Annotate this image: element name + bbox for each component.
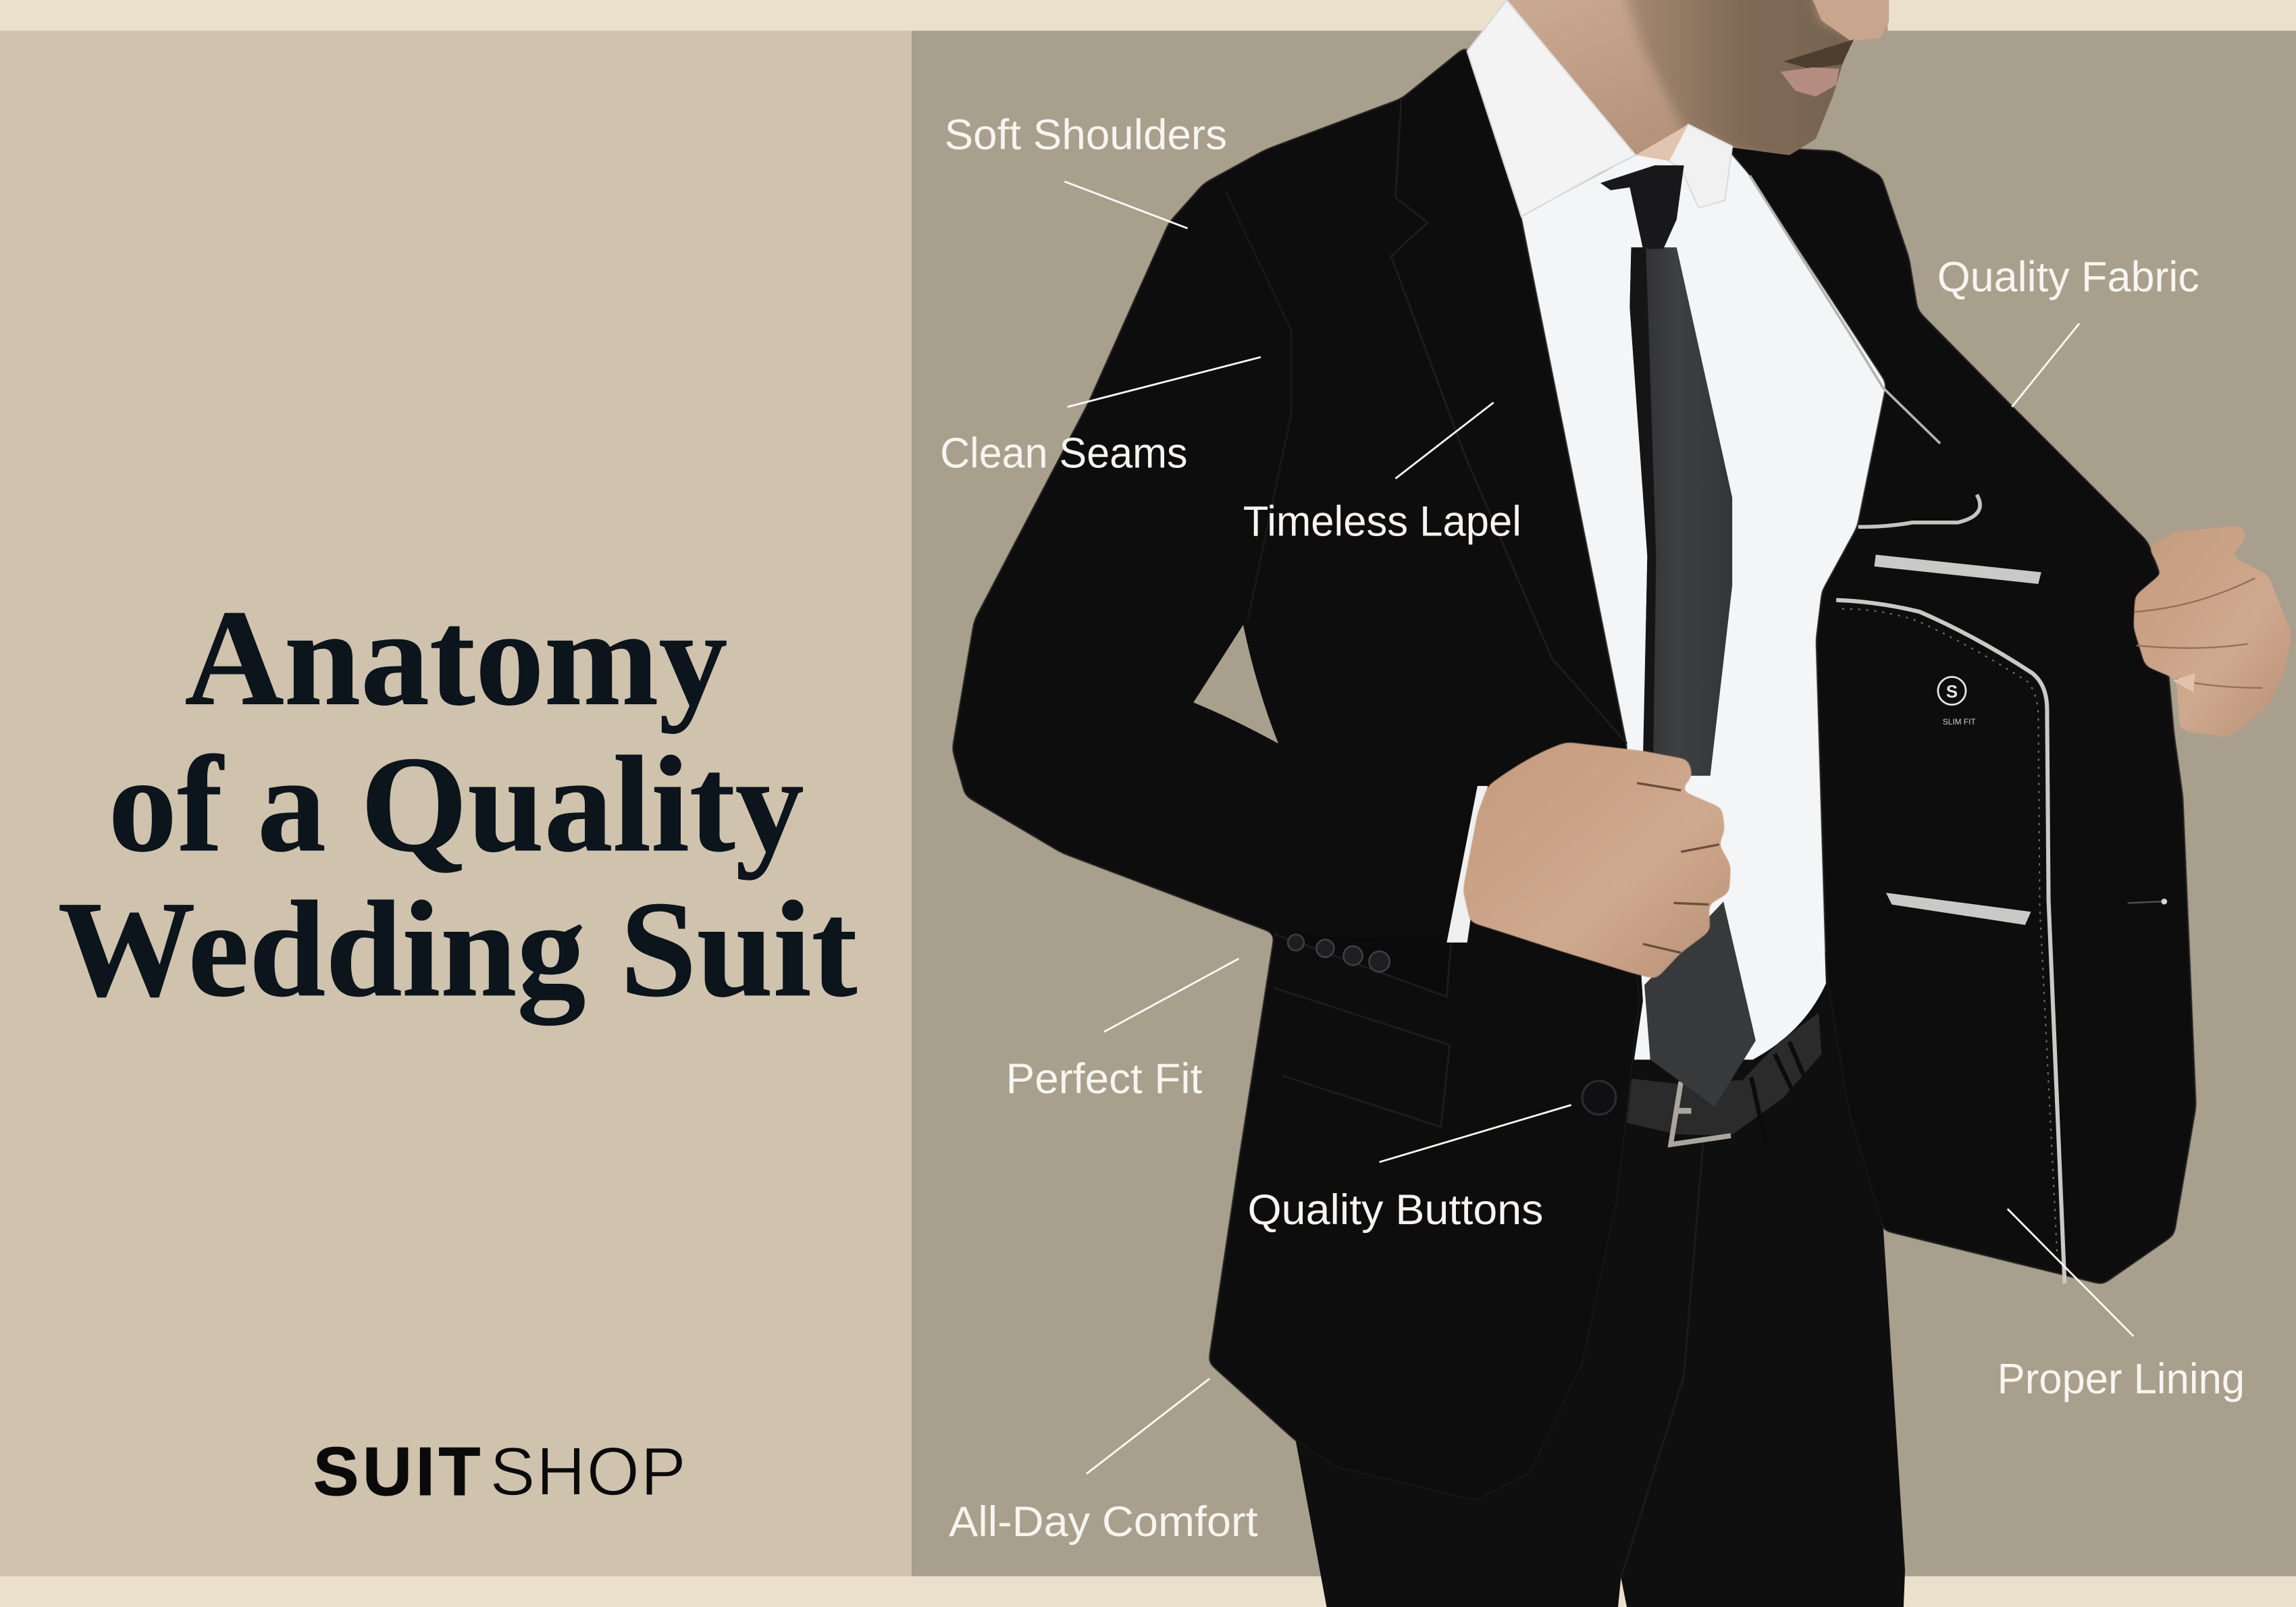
jacket left front bbox=[951, 36, 1640, 1502]
label: Quality Fabric bbox=[1937, 253, 2199, 407]
photo: man in black suit bbox=[951, 0, 2291, 1607]
pocket flap bbox=[1274, 988, 1450, 1127]
shirt collar bbox=[1467, 0, 1732, 248]
label: Quality Fabric: Quality Fabric bbox=[1937, 253, 2199, 300]
label: All-Day Comfort bbox=[949, 1379, 1258, 1546]
logo: Suitshop: SHOP bbox=[490, 1434, 686, 1510]
inner upper piping bbox=[1858, 495, 1980, 527]
sleeve cuff bbox=[1274, 934, 1451, 997]
jacket right side opened bbox=[1723, 145, 2197, 1285]
brand label: S bbox=[1946, 681, 1958, 702]
sleeve buttons bbox=[1288, 934, 1390, 972]
belt bbox=[1625, 1013, 1821, 1144]
hand: center bbox=[1463, 742, 1731, 979]
jacket button bbox=[1582, 1081, 1616, 1115]
sleeve seam bbox=[1226, 192, 1291, 621]
panel: right photo background bbox=[912, 31, 2296, 1576]
head and neck bbox=[1507, 0, 1889, 164]
panel: left title panel bbox=[0, 31, 912, 1576]
label: Clean Seams: Clean Seams bbox=[940, 430, 1188, 477]
label: Soft Shoulders bbox=[945, 111, 1227, 228]
lapel seams bbox=[1391, 98, 1627, 743]
brand label: SLIM FIT bbox=[1943, 717, 1976, 727]
title bbox=[58, 582, 857, 1026]
inner breast pocket bbox=[1875, 555, 2041, 584]
label: Timeless Lapel: Timeless Lapel bbox=[1243, 498, 1521, 545]
nose bbox=[1812, 0, 1889, 41]
logo: Suitshop bbox=[313, 1434, 686, 1510]
title: Wedding Suit bbox=[58, 873, 857, 1026]
tie knot bbox=[1600, 165, 1684, 248]
mustache bbox=[1783, 40, 1854, 69]
title: Anatomy bbox=[185, 582, 727, 735]
hand: right bbox=[2133, 525, 2291, 737]
logo: Suitshop: SUIT bbox=[313, 1434, 480, 1510]
inner lower pocket bbox=[1886, 893, 2031, 925]
lips bbox=[1781, 68, 1839, 97]
trousers bbox=[1296, 951, 1905, 1607]
label: Timeless Lapel bbox=[1243, 402, 1521, 545]
lapel piping bbox=[1750, 176, 1940, 444]
shirt bbox=[1521, 139, 1901, 1059]
buttonhole bbox=[2128, 899, 2167, 905]
title: of a Quality bbox=[108, 728, 804, 880]
label: Quality Buttons: Quality Buttons bbox=[1247, 1186, 1543, 1234]
label: Clean Seams bbox=[940, 357, 1261, 477]
label: All-Day Comfort: All-Day Comfort bbox=[949, 1498, 1258, 1546]
label: Proper Lining: Proper Lining bbox=[1998, 1356, 2245, 1403]
gap between arm and body bbox=[1193, 625, 1278, 743]
shirt cuff bbox=[1446, 786, 1488, 943]
label: Perfect Fit: Perfect Fit bbox=[1006, 1055, 1202, 1103]
label: Perfect Fit bbox=[1006, 959, 1238, 1103]
label: Proper Lining bbox=[1998, 1209, 2245, 1403]
label: Soft Shoulders: Soft Shoulders bbox=[945, 111, 1227, 159]
label: Quality Buttons bbox=[1247, 1105, 1571, 1234]
tie bbox=[1629, 247, 1756, 1107]
brand label bbox=[1938, 677, 1976, 727]
trouser crease bbox=[1621, 1127, 1704, 1578]
belt buckle bbox=[1671, 1082, 1731, 1144]
beard bbox=[1623, 0, 1850, 155]
main lining piping bbox=[1836, 600, 2064, 1284]
